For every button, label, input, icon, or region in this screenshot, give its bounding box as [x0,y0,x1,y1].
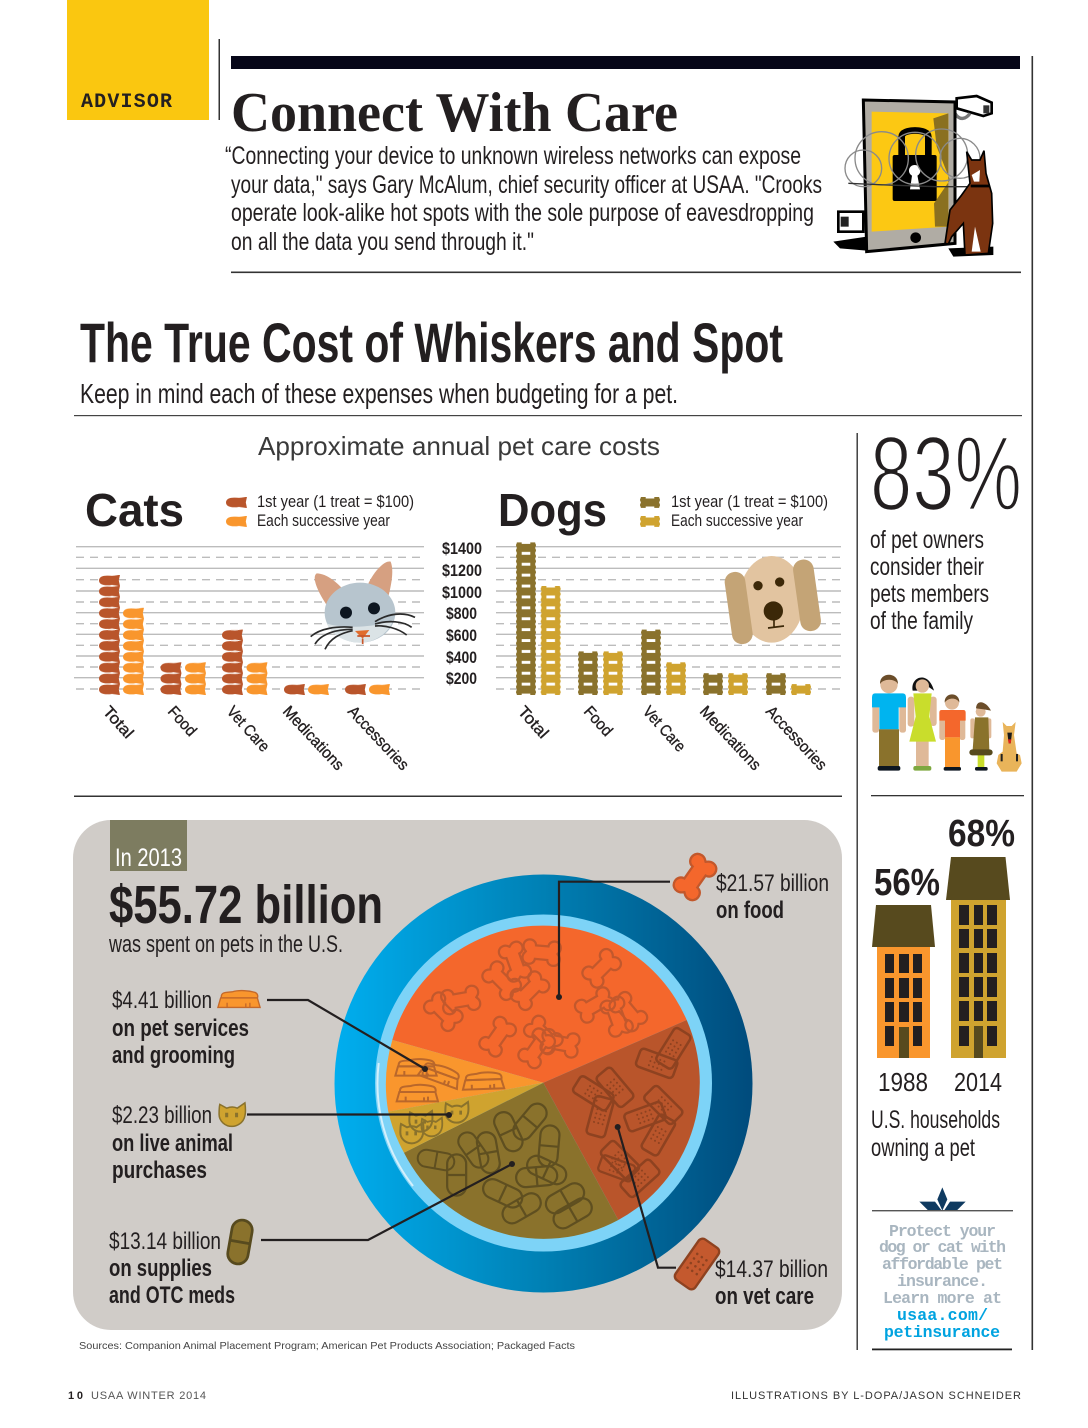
text: family stat: of the family [870,607,973,635]
legend: dogs: Each successive year [671,511,803,530]
legend: cats: 1st year (1 treat = $100) [257,492,414,511]
text: households [871,1106,1000,1162]
footer: page number: 10 [68,1390,83,1402]
stat: 83 percent [870,415,1022,635]
bars: dogs accessories [766,673,811,695]
pie icons: bones [421,939,650,1071]
years [878,1067,1002,1097]
axis labels: dollars: $1000 [442,583,482,602]
label: live animals: purchases [112,1157,207,1184]
slice: vet care [543,1020,700,1220]
bars: dogs vet care [641,630,686,695]
label: vet care: $14.37 billion [715,1256,828,1283]
text: family stat [870,526,989,635]
slice: services [386,1040,543,1112]
chart title: Approximate annual pet care costs [258,431,660,461]
chart: pie in bowl [334,874,752,1292]
legend: dogs [640,492,828,530]
icon: dog face [723,556,822,645]
text block: security quote [225,142,822,256]
girl [969,702,993,771]
years: 2014 [954,1067,1002,1097]
label: advisor: ADVISOR [81,91,172,114]
label: supplies [109,1228,235,1309]
panel: advisor tab [67,0,209,120]
pie icons: grooming brushes [395,1059,504,1101]
bars: cats total [99,575,144,695]
label: services [112,987,249,1069]
bars: cats vet care [222,630,268,695]
label: supplies: and OTC meds [109,1282,235,1309]
bars: cats accessories [345,684,390,695]
axis labels: dollars: $400 [446,648,477,667]
text: households: owning a pet [871,1134,975,1162]
label: supplies: on supplies [109,1255,212,1282]
text: households: U.S. households [871,1106,1000,1134]
callout: pet insurance: usaa.com/ [897,1306,988,1325]
label: 56 percent: 56% [874,862,940,904]
icon: brush [218,991,260,1007]
label: 68 percent: 68% [948,813,1015,855]
axis labels: dogs [514,703,830,774]
text block: security quote: “Connecting your device to unknown wireless networks can expose [225,142,801,170]
axis labels: cats: Total [99,703,136,742]
slice: live animals [388,1083,543,1153]
label: live animals: on live animal [112,1130,233,1157]
years: 1988 [878,1067,928,1097]
axis labels: cats: Food [164,703,199,740]
building: 1988 [872,905,935,1058]
stat: 83 percent: 83% [870,415,1022,533]
leader dots [422,994,621,1167]
text: family stat: of pet owners [870,526,984,554]
label: food: on food [716,897,784,924]
bars: cats medications [284,684,329,695]
tab: in 2013 [110,820,187,872]
icon: phone with padlock, barbed wire, camera and guard dog [833,96,993,257]
text block: security quote: on all the data you send through it." [231,228,534,256]
tab: in 2013: In 2013 [115,844,182,872]
boy [939,694,966,771]
icon: bandage [673,1237,721,1291]
axis labels: cats: Medications [279,703,347,774]
label: food: $21.57 billion [716,870,829,897]
icon: cat face [311,561,415,649]
axis labels: dogs: Total [514,703,551,742]
woman [908,678,937,771]
axis labels: dollars: $200 [446,669,477,688]
heading: the true cost: The True Cost of Whiskers and Spot [80,311,783,374]
footer: credits: ILLUSTRATIONS BY L-DOPA/JASON SCHNEIDER [731,1390,1021,1402]
heading: connect with care: Connect With Care [231,82,678,144]
big number: $55.72 billion [109,875,383,935]
callout: pet insurance: dog or cat with [879,1238,1006,1257]
sources: Sources: Companion Animal Placement Program; American Pet Products Association; Packaged Facts [79,1340,575,1352]
label: supplies: $13.14 billion [109,1228,221,1255]
axis labels: dogs: Medications [696,703,764,774]
dog [997,722,1022,772]
label: services: on pet services [112,1015,249,1042]
label: live animals [112,1102,233,1184]
chart: cats [85,484,415,774]
label: services: $4.41 billion [112,987,212,1014]
text: family stat: pets members [870,580,989,608]
bars: dogs total [516,542,561,695]
label: food [716,870,829,924]
axis labels: dollars: $1200 [442,561,482,580]
axis labels: dogs: Vet Care [639,703,689,756]
icon: family with dog [872,675,1022,772]
label: vet care: on vet care [715,1283,814,1310]
stat: buildings 1988 vs 2014 [871,813,1015,1162]
icon: usaa eagle logo [919,1187,966,1211]
building: 2014 [946,857,1010,1058]
grid lines [74,547,841,689]
axis labels: cats: Vet Care [223,703,273,756]
label: vet care [715,1256,828,1310]
label: live animals: $2.23 billion [112,1102,212,1129]
pie icons: bandages [572,1027,692,1199]
heading: cats: Cats [85,484,184,536]
callout: pet insurance: petinsurance [884,1323,1000,1342]
heading: dogs: Dogs [498,484,607,536]
text block: security quote: your data," says Gary McAlum, chief security officer at USAA. "Crooks [231,171,822,199]
callout: pet insurance: Learn more at [883,1289,1002,1308]
bars: cats food [160,662,206,695]
callout: pet insurance [879,1222,1006,1342]
bars: dogs medications [703,673,748,695]
axis labels: dollars [442,539,482,688]
subheading: Keep in mind each of these expenses when budgeting for a pet. [80,378,678,409]
icon: cat [219,1103,245,1126]
slice: supplies [404,1083,618,1239]
axis labels: cats [99,703,412,774]
pie icons: pills [416,1100,595,1232]
callout: pet insurance: insurance. [897,1272,988,1291]
leader lines [247,882,676,1268]
bars: dogs food [578,651,623,695]
axis labels: cats: Accessories [344,703,412,774]
text: family stat: consider their [870,553,984,581]
callout: pet insurance: Protect your [889,1222,996,1241]
legend: cats: Each successive year [257,511,390,530]
pie icons: cats [400,1102,468,1143]
axis labels: dollars: $600 [446,626,477,645]
callout: pet insurance: affordable pet [882,1255,1003,1274]
legend: dogs: 1st year (1 treat = $100) [671,492,828,511]
icon: bone [671,851,719,903]
chart: dogs [498,484,830,774]
man [872,675,906,771]
axis labels: dogs: Food [580,703,615,740]
panel: spending [73,820,842,1330]
text: spent: was spent on pets in the U.S. [108,931,343,958]
axis labels: dollars: $1400 [442,539,482,558]
axis labels: dogs: Accessories [762,703,830,774]
axis labels: dollars: $800 [446,604,477,623]
slice: food [392,926,687,1083]
label: services: and grooming [112,1042,235,1069]
text block: security quote: operate look-alike hot spots with the sole purpose of eavesdropping [231,199,814,227]
icon: pill [226,1218,254,1266]
legend: cats [226,492,414,530]
footer: page number: USAA WINTER 2014 [91,1390,206,1402]
